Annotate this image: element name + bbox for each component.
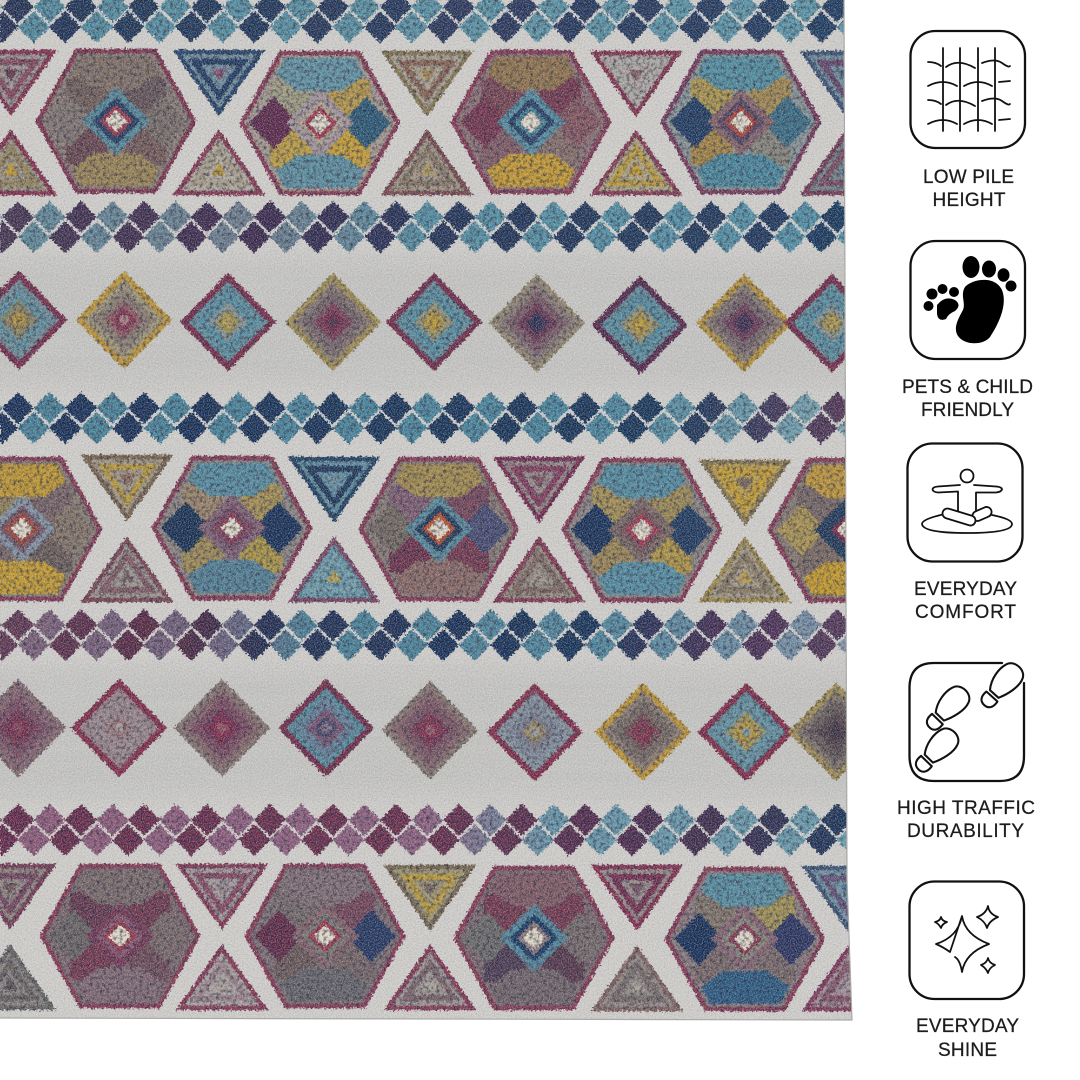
triangle	[385, 133, 469, 193]
triangle	[388, 867, 472, 927]
label: high traffic durability: DURABILITY	[907, 821, 1024, 842]
triangle	[497, 540, 581, 600]
triangle	[177, 52, 261, 112]
diamond	[702, 687, 790, 777]
icon: high traffic durability	[910, 658, 1028, 781]
triangle	[292, 540, 376, 600]
triangle	[497, 459, 581, 519]
diamond	[289, 277, 377, 367]
hexagon	[453, 52, 609, 192]
hexagon	[667, 869, 823, 1009]
label: everyday shine: EVERYDAY	[916, 1016, 1019, 1037]
row one: hexagon medallions and triangles	[0, 51, 888, 193]
band: top diamonds	[0, 0, 860, 47]
triangle	[799, 49, 844, 114]
triangle	[0, 866, 52, 926]
icon: everyday shine	[910, 882, 1024, 999]
hexagon	[242, 53, 398, 193]
triangle	[385, 53, 469, 113]
triangle	[800, 132, 844, 197]
triangle	[806, 868, 890, 928]
row two: diamond motifs	[0, 683, 880, 777]
footprint: middle	[921, 681, 974, 736]
diamond	[0, 275, 63, 365]
band: fifth diamonds	[0, 804, 860, 860]
footprint: bottom	[910, 723, 963, 778]
row three: hexagon medallions and triangles	[0, 866, 890, 1009]
triangle	[85, 457, 169, 517]
triangle	[0, 133, 53, 193]
diamond	[390, 277, 478, 367]
label: low pile height: HEIGHT	[932, 190, 1006, 211]
row one: diamond motifs	[0, 275, 876, 370]
diamond	[700, 278, 788, 368]
row two: hexagon medallions and triangles	[0, 457, 926, 600]
triangle	[180, 866, 264, 926]
diamond	[792, 687, 880, 777]
triangle	[703, 540, 787, 600]
label: pets and child friendly: FRIENDLY	[921, 400, 1014, 421]
label: everyday shine: SHINE	[938, 1040, 997, 1061]
label: low pile height: LOW PILE	[923, 167, 1014, 188]
diamond	[599, 687, 687, 777]
triangle	[703, 462, 787, 522]
band: third diamonds	[0, 392, 860, 448]
hexagon	[42, 866, 198, 1006]
icon: pets and child friendly	[910, 241, 1025, 359]
triangle	[0, 948, 52, 1008]
hexagon	[247, 866, 403, 1006]
hexagon	[0, 459, 100, 599]
rug field	[0, 0, 856, 1022]
hexagon	[456, 868, 612, 1008]
footprint: top right	[975, 658, 1028, 713]
hexagon	[770, 460, 926, 600]
diamond	[784, 272, 845, 374]
triangle	[292, 459, 376, 519]
triangle	[806, 949, 890, 1009]
triangle	[177, 133, 261, 193]
diamond	[386, 685, 474, 775]
hexagon	[361, 459, 517, 599]
label: pets and child friendly: PETS & CHILD	[902, 377, 1033, 398]
triangle	[85, 540, 169, 600]
label: everyday comfort: EVERYDAY	[914, 579, 1017, 600]
diamond	[0, 683, 62, 773]
hexagon	[154, 458, 310, 598]
triangle	[595, 867, 679, 927]
triangle	[388, 948, 472, 1008]
triangle	[180, 948, 264, 1008]
rug edge line	[0, 0, 852, 1020]
label: everyday comfort: COMFORT	[915, 602, 1016, 623]
mottled grey field stripes	[0, 245, 856, 810]
hexagon	[38, 51, 194, 191]
diamond	[493, 278, 581, 368]
diamond	[178, 683, 266, 773]
diamond	[491, 687, 579, 777]
pile speckle texture	[0, 0, 856, 1022]
band: second diamonds	[0, 201, 860, 257]
diamond	[596, 280, 684, 370]
triangle	[594, 133, 678, 193]
icon: low pile height	[910, 31, 1025, 148]
diamond	[75, 683, 163, 773]
diamond	[80, 275, 168, 365]
label: high traffic durability: HIGH TRAFFIC	[897, 798, 1035, 819]
triangle	[0, 52, 53, 112]
icon: everyday comfort	[908, 444, 1022, 562]
triangle	[594, 53, 678, 113]
hexagon	[663, 52, 819, 192]
hexagon	[564, 460, 720, 600]
diamond	[282, 683, 370, 773]
band: fourth diamonds	[0, 609, 860, 665]
triangle	[595, 949, 679, 1009]
diamond	[184, 277, 272, 367]
